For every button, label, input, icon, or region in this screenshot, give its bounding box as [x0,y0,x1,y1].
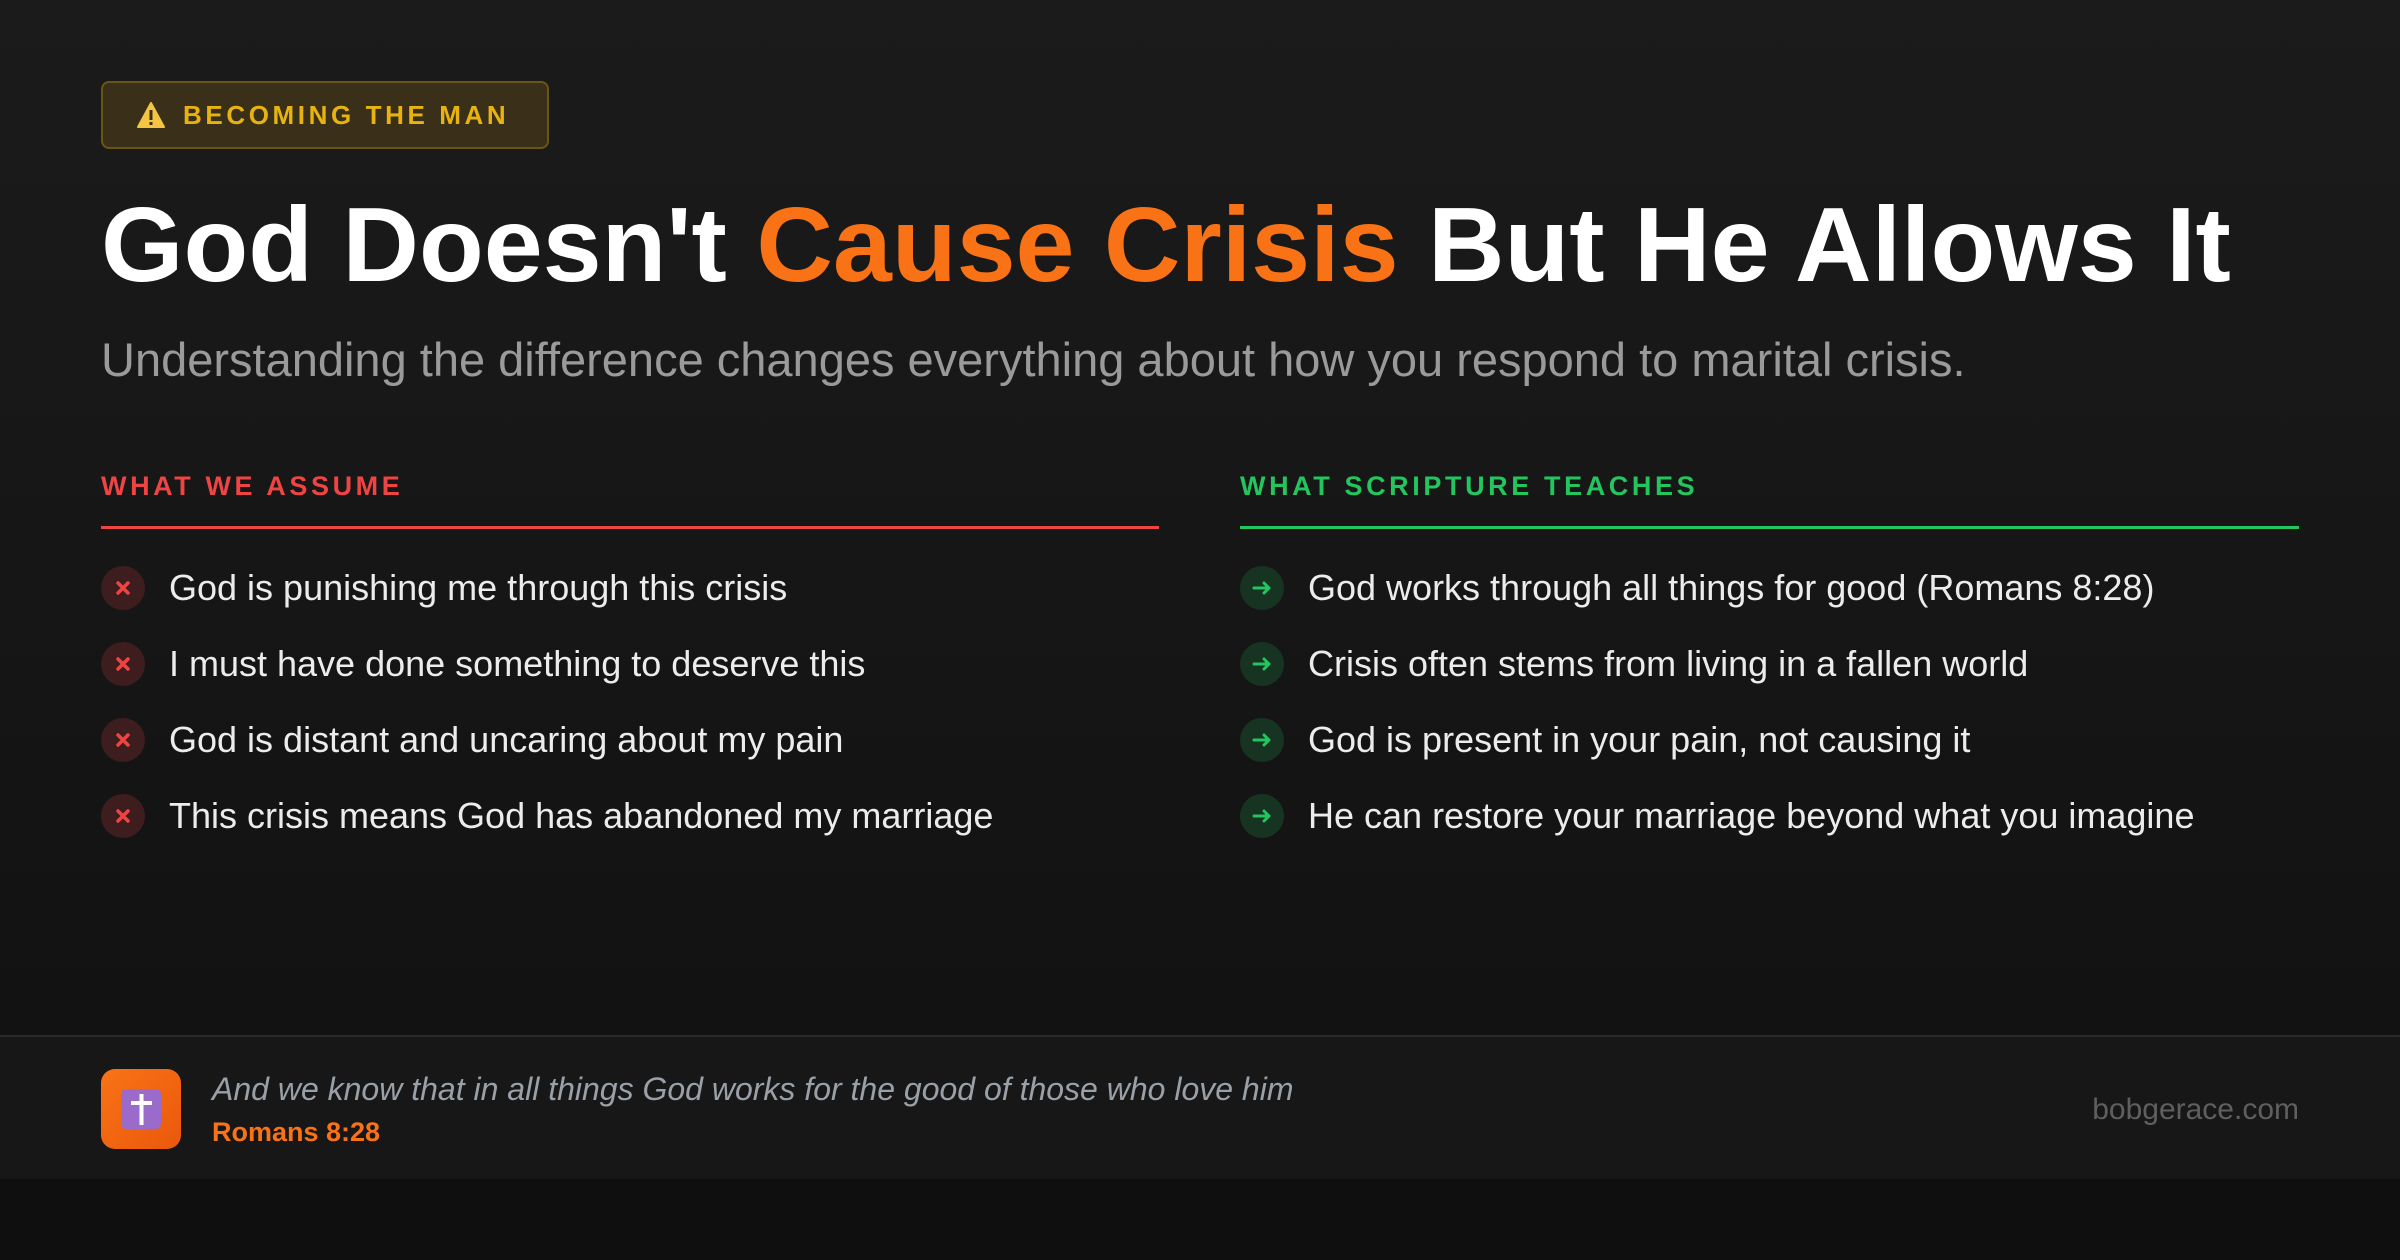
list: assumptions: God is punishing me through this crisis [169,567,787,608]
list: assumptions: This crisis means God has abandoned my marriage [169,795,993,836]
site url: bobgerace.com [2092,1093,2299,1126]
panel: what we assume [101,471,1159,838]
heading: what scripture teaches: WHAT SCRIPTURE TEACHES [1240,471,1698,501]
list: teachings: God is present in your pain, not causing it [1308,719,1970,760]
list: assumptions [101,566,993,838]
list: teachings: God works through all things for good (Romans 8:28) [1308,567,2154,608]
heading: what we assume: WHAT WE ASSUME [101,471,403,501]
list: teachings: Crisis often stems from living in a fallen world [1308,643,2028,684]
badge: BECOMING THE MAN [183,100,509,130]
subtitle: Understanding the difference changes everything about how you respond to marital crisis. [101,333,1966,386]
list: teachings: He can restore your marriage beyond what you imagine [1308,795,2194,836]
panel: what scripture teaches [1240,471,2299,838]
icon: cross [101,1069,181,1149]
list: teachings [1240,566,2194,838]
list: assumptions: I must have done something to deserve this [169,643,865,684]
footer [0,1035,2400,1179]
quote: And we know that in all things God works for the good of those who love him [212,1071,1293,1107]
title: God Doesn't Cause Crisis But He Allows It [101,186,2231,304]
badge [101,81,549,149]
reference: Romans 8:28 [212,1117,380,1147]
list: assumptions: God is distant and uncaring about my pain [169,719,843,760]
